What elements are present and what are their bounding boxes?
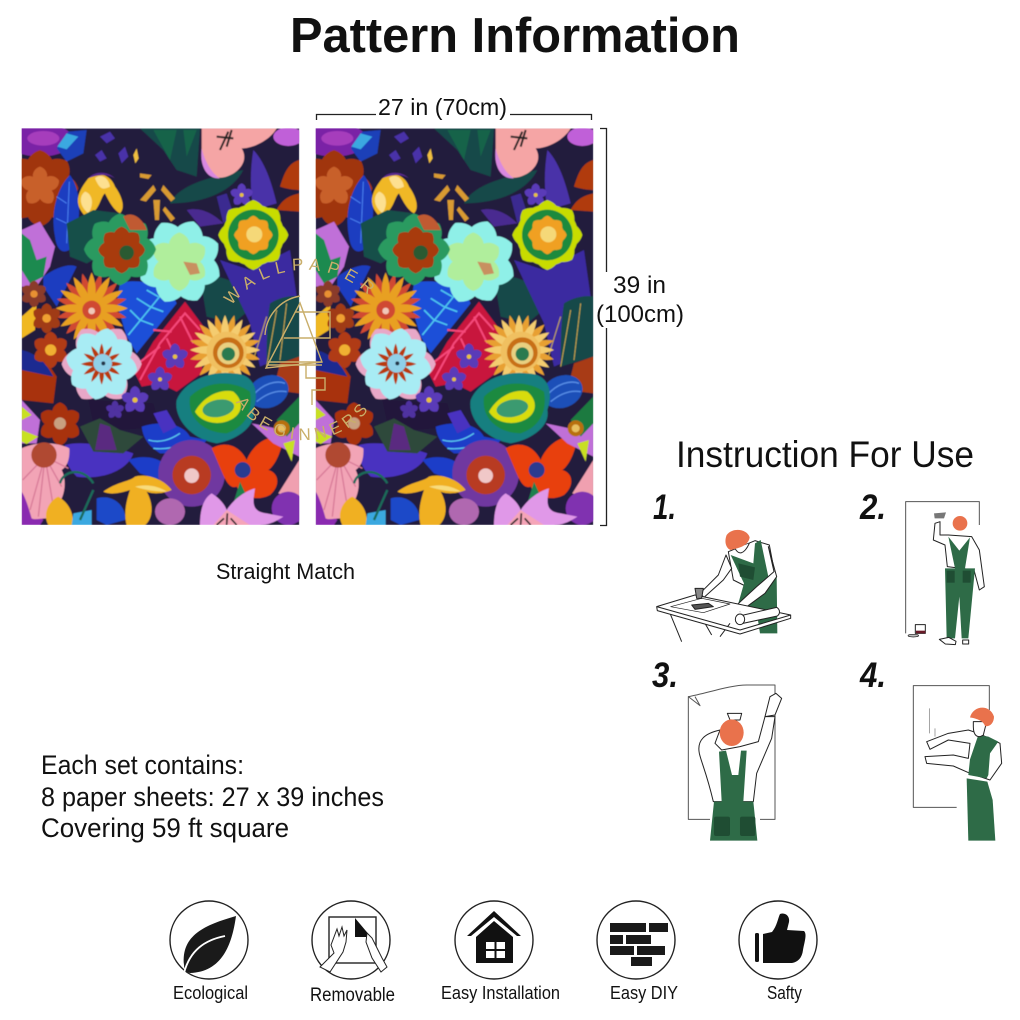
dark lower left (22, 353, 57, 403)
label: Ecological: Ecological (173, 983, 248, 1003)
panel: right wallpaper sheet (296, 123, 599, 525)
yellow-green flower (223, 204, 284, 266)
bottom lily (200, 488, 283, 525)
step 4 number: 4. (859, 656, 886, 695)
blue fern (117, 281, 177, 353)
watermark: brand text: ABEGINNERS (236, 398, 366, 440)
icon: thumbs up (739, 901, 817, 979)
pink lily top (202, 128, 277, 178)
daisy orange (48, 264, 136, 352)
icon: ecological leaf (170, 901, 248, 979)
teal field (200, 276, 253, 323)
icon: removable sheet (312, 901, 390, 979)
icon: bricks (597, 901, 675, 979)
brown flower top left (2, 150, 78, 227)
label: Removable: Removable (310, 985, 395, 1006)
left lower flowers (22, 400, 40, 443)
illustration: step 2 worker smoothing wall (906, 502, 984, 645)
instruction heading: Instruction For Use (676, 434, 974, 475)
step 1 number: 1. (653, 488, 676, 527)
step 2 number: 2. (859, 488, 886, 527)
white-blue flower (45, 308, 158, 420)
blue ribbed bud (243, 370, 293, 414)
label: Safty: Safty (767, 982, 803, 1003)
label: Easy Installation: Easy Installation (441, 982, 560, 1003)
succulent and purple leaf (65, 443, 133, 477)
sunflower (181, 306, 269, 394)
teal background buds (140, 173, 175, 222)
width dimension: 27 in (70cm) (378, 94, 507, 120)
bottom-left corner purple (22, 487, 43, 525)
set contents text (41, 750, 384, 843)
orange red flower (212, 437, 283, 498)
match label: Straight Match (216, 559, 355, 584)
label: Easy DIY: Easy DIY (610, 982, 678, 1003)
height dimension: (100cm) (596, 301, 684, 328)
pink dahlia fan (22, 442, 69, 519)
yellow bottom flower (103, 476, 172, 525)
step 3 number: 3. (652, 656, 678, 695)
watermark: brand text: WALLPAPER (222, 258, 374, 303)
purple round flower (158, 440, 225, 507)
orange green flower (92, 221, 148, 278)
set contents text: Covering 59 ft square (41, 813, 289, 843)
blue left leaf (54, 175, 79, 251)
small purple flowers (161, 343, 189, 370)
bottom tulip and blues (46, 497, 73, 525)
red leaf (135, 302, 205, 392)
right side flowers (252, 423, 299, 457)
title: Pattern Information (290, 9, 740, 63)
height dimension: 39 in (613, 272, 666, 299)
illustration: step 4 worker pressing sheet (913, 686, 1002, 841)
panel: left wallpaper sheet (2, 123, 305, 525)
set contents text: Each set contains: (41, 750, 244, 780)
illustration: step 1 worker at table (657, 530, 791, 642)
illustration: step 3 worker hanging sheet (688, 685, 782, 841)
watermark (222, 258, 374, 440)
top region leaves (7, 123, 73, 157)
teal flower (176, 373, 256, 443)
icon: house (455, 901, 533, 979)
watermark: brand text (222, 258, 374, 440)
set contents text: 8 paper sheets: 27 x 39 inches (41, 782, 384, 812)
height dimension (594, 128, 686, 526)
width dimension (316, 94, 592, 120)
mint flower (148, 230, 211, 293)
blue leaves centre (142, 423, 207, 453)
iris yellow (78, 175, 123, 216)
watermark: roller emblem (265, 296, 330, 405)
small orange flowers (31, 332, 70, 368)
left purple/green flower (22, 222, 55, 287)
